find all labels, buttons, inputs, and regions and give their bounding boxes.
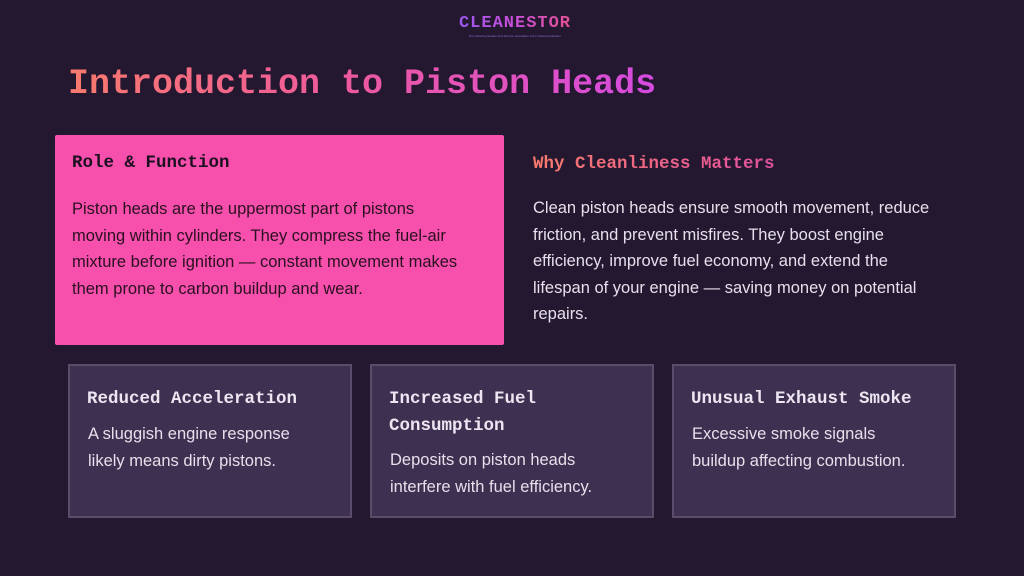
logo: CLEANESTOR <box>459 14 571 33</box>
card: unusual exhaust smoke: Unusual Exhaust Smoke <box>691 389 912 409</box>
card: reduced acceleration <box>68 364 352 518</box>
panel: role & function <box>55 135 504 345</box>
card: increased fuel consumption: Increased Fuel <box>389 389 536 409</box>
card: unusual exhaust smoke: buildup affecting combustion. <box>692 452 905 470</box>
text: role: Piston heads are the uppermost part of pistons <box>72 200 414 218</box>
text: role <box>72 200 457 298</box>
card: increased fuel consumption <box>370 364 654 518</box>
card: unusual exhaust smoke: Excessive smoke signals <box>692 425 875 443</box>
text: why: friction, and prevent misfires. They boost engine <box>533 226 884 244</box>
text: role: them prone to carbon buildup and wear. <box>72 280 363 298</box>
logo: Pro Cleaning Guides And Service Journalism From Cleaning Masters <box>469 34 561 38</box>
card: reduced acceleration: likely means dirty pistons. <box>88 452 276 470</box>
card: reduced acceleration: Reduced Acceleration <box>87 389 297 409</box>
text: why: lifespan of your engine — saving money on potential <box>533 278 916 296</box>
text: why: repairs. <box>533 305 588 323</box>
text: why <box>533 199 929 323</box>
panel: why cleanliness matters <box>533 154 929 323</box>
title: Introduction to Piston Heads <box>68 64 656 104</box>
card: unusual exhaust smoke <box>672 364 956 518</box>
heading: role & function: Role & Function <box>72 153 230 173</box>
text: role: mixture before ignition — constant movement makes <box>72 253 457 271</box>
text: why: efficiency, improve fuel economy, and extend the <box>533 252 888 270</box>
card: increased fuel consumption: interfere with fuel efficiency. <box>390 478 592 496</box>
text: why: Clean piston heads ensure smooth movement, reduce <box>533 199 929 217</box>
heading: why cleanliness: Why Cleanliness Matters <box>533 154 775 174</box>
card: increased fuel consumption: Deposits on piston heads <box>390 451 575 469</box>
card: reduced acceleration: A sluggish engine response <box>88 425 290 443</box>
text: role: moving within cylinders. They compress the fuel-air <box>72 226 446 244</box>
card: increased fuel consumption: Consumption <box>389 416 505 436</box>
